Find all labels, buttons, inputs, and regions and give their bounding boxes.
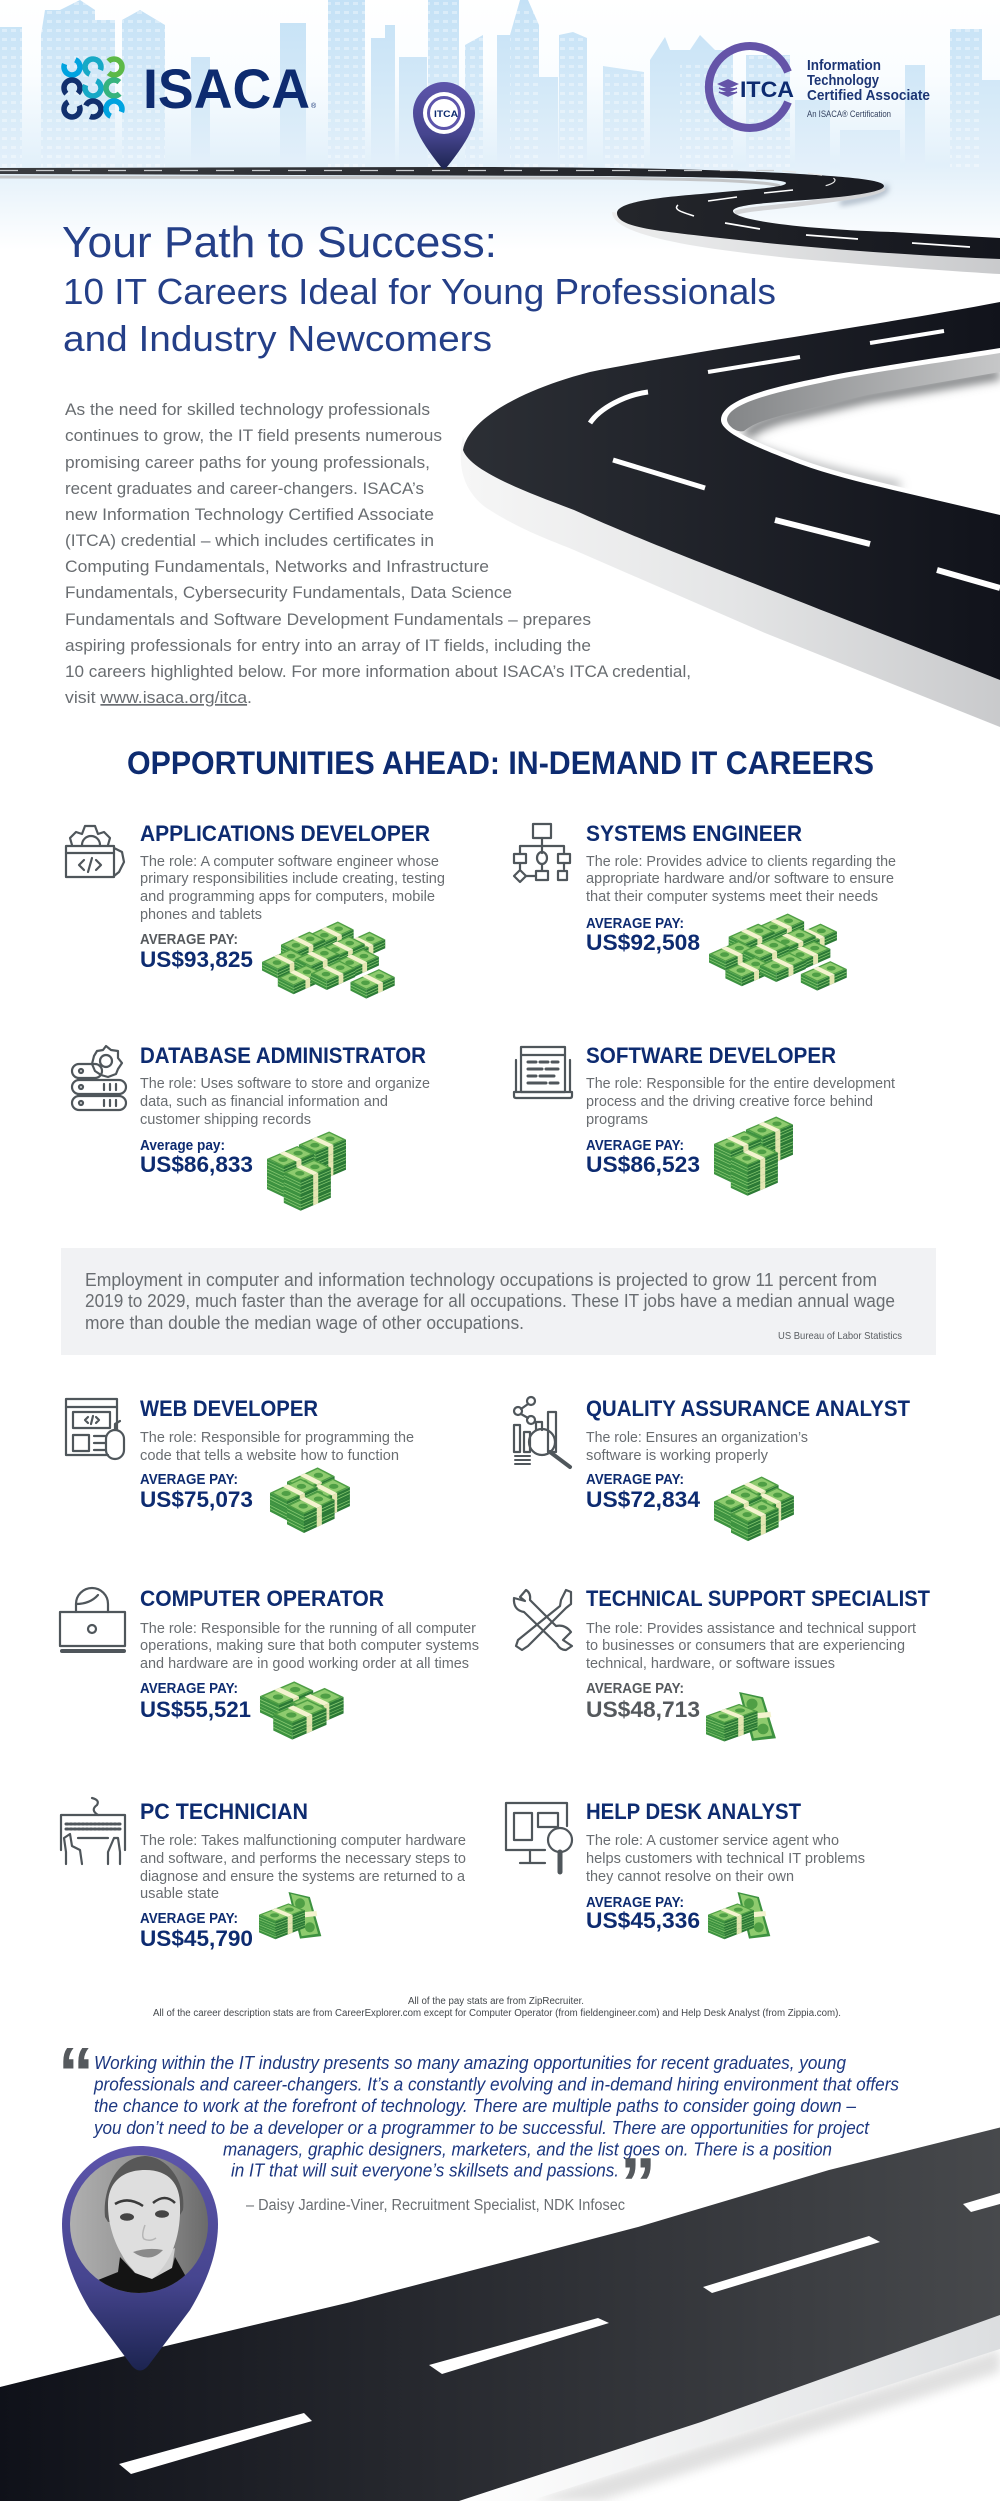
icon: laptop with code bbox=[514, 1047, 572, 1098]
career: Computer Operator: COMPUTER OPERATOR bbox=[140, 1586, 384, 1611]
intro paragraph: recent graduates and career-changers. ISACA’s bbox=[65, 479, 424, 498]
career: Systems Engineer: The role: Provides advice to clients regarding the bbox=[586, 854, 896, 870]
logo: ITCA certification: ITCA bbox=[740, 77, 794, 102]
career: Systems Engineer: that their computer systems meet their needs bbox=[586, 889, 878, 905]
career: Database Administrator: DATABASE ADMINISTRATOR bbox=[140, 1043, 426, 1068]
career: Web Developer: US$75,073 bbox=[140, 1487, 253, 1512]
intro paragraph: visit www.isaca.org/itca . bbox=[65, 688, 252, 707]
career: Computer Operator: and hardware are in good working order at all times bbox=[140, 1656, 469, 1672]
career: PC Technician: usable state bbox=[140, 1886, 219, 1902]
career: Systems Engineer: US$92,508 bbox=[586, 930, 700, 955]
career: Quality Assurance Analyst: US$72,834 bbox=[586, 1487, 701, 1512]
intro paragraph bbox=[65, 400, 691, 707]
intro paragraph: Fundamentals and Software Development Fundamentals – prepares bbox=[65, 610, 591, 629]
opening quote mark: “ bbox=[58, 2034, 94, 2114]
career: Computer Operator: operations, making sure that both computer systems bbox=[140, 1638, 479, 1654]
icon: tall stack of cash bbox=[267, 1132, 346, 1211]
icon: cash and bills bbox=[259, 1892, 321, 1939]
callout: employment statistic: 2019 to 2029, much faster than the average for all occupations. These IT jobs have a median annual wage bbox=[85, 1291, 895, 1311]
icon: code window with gear bbox=[66, 826, 124, 877]
career: Database Administrator bbox=[72, 1043, 430, 1211]
icon: cash and bills bbox=[708, 1892, 770, 1939]
career: Computer Operator bbox=[60, 1586, 479, 1740]
career: PC Technician: AVERAGE PAY: bbox=[140, 1910, 238, 1927]
career: Help Desk Analyst: they cannot resolve on their own bbox=[586, 1869, 794, 1885]
testimonial quote: the chance to work at the forefront of technology. There are multiple paths to consider going down – bbox=[94, 2096, 857, 2116]
icon: hands on keyboard bbox=[61, 1798, 125, 1864]
source footnote bbox=[153, 1996, 841, 2019]
testimonial quote: in IT that will suit everyone’s skillsets and passions. bbox=[231, 2160, 619, 2180]
logo: ITCA certification bbox=[709, 46, 930, 128]
career: Web Developer bbox=[66, 1396, 414, 1533]
icon: wrench and screwdriver bbox=[514, 1590, 572, 1650]
testimonial quote: professionals and career-changers. It’s a constantly evolving and in-demand hiring environment that offers bbox=[93, 2074, 899, 2094]
career: Web Developer: WEB DEVELOPER bbox=[140, 1396, 318, 1421]
logo: ISACA: ® bbox=[311, 102, 317, 110]
career: PC Technician: diagnose and ensure the systems are returned to a bbox=[140, 1869, 466, 1885]
bottom road bbox=[0, 2128, 1000, 2501]
career: Applications Developer: The role: A computer software engineer whose bbox=[140, 854, 439, 870]
career: Applications Developer: and programming apps for computers, mobile bbox=[140, 889, 435, 905]
career: Database Administrator: US$86,833 bbox=[140, 1152, 253, 1177]
career: Systems Engineer: appropriate hardware and/or software to ensure bbox=[586, 871, 894, 887]
career: Software Developer: SOFTWARE DEVELOPER bbox=[586, 1043, 836, 1068]
career: Web Developer: The role: Responsible for programming the bbox=[140, 1430, 414, 1446]
career: Help Desk Analyst: US$45,336 bbox=[586, 1908, 700, 1933]
career: Help Desk Analyst: HELP DESK ANALYST bbox=[586, 1799, 802, 1824]
career: Applications Developer: primary responsibilities include creating, testing bbox=[140, 871, 445, 887]
career: Applications Developer: AVERAGE PAY: bbox=[140, 931, 238, 948]
testimonial quote: managers, graphic designers, marketers, and the list goes on. There is a position bbox=[223, 2140, 832, 2160]
icon: web page and mouse bbox=[66, 1399, 124, 1459]
icon: four stacks of cash bbox=[714, 1476, 794, 1541]
career: Quality Assurance Analyst: The role: Ensures an organization’s bbox=[586, 1430, 808, 1446]
testimonial quote bbox=[58, 2034, 899, 2224]
career: Database Administrator: data, such as financial information and bbox=[140, 1094, 388, 1110]
map pin with portrait bbox=[62, 2146, 218, 2370]
career: Help Desk Analyst: AVERAGE PAY: bbox=[586, 1894, 684, 1911]
source footnote: All of the career description stats are from CareerExplorer.com except for Computer Operator (from fieldengineer.com) and Help Desk Analyst (from Zippia.com). bbox=[153, 2008, 841, 2019]
career: Applications Developer: US$93,825 bbox=[140, 947, 253, 972]
testimonial quote: Working within the IT industry presents so many amazing opportunities for recent graduates, young bbox=[94, 2053, 846, 2073]
city skyline bbox=[0, 0, 1000, 170]
title: 10 IT Careers Ideal for Young Professionals bbox=[63, 271, 776, 312]
intro paragraph: 10 careers highlighted below. For more information about ISACA’s ITCA credential, bbox=[65, 662, 691, 681]
icon: database with gear bbox=[72, 1046, 126, 1110]
career: Help Desk Analyst bbox=[506, 1799, 865, 1939]
quote attribution: – Daisy Jardine-Viner, Recruitment Specialist, NDK Infosec bbox=[246, 2197, 625, 2214]
career: PC Technician bbox=[61, 1798, 466, 1951]
logo: ISACA: ISACA bbox=[143, 57, 310, 120]
career: Applications Developer: phones and tablets bbox=[140, 907, 262, 923]
callout: employment statistic: US Bureau of Labor Statistics bbox=[778, 1330, 902, 1342]
career: Systems Engineer: AVERAGE PAY: bbox=[586, 915, 684, 932]
icon: four stacks of cash bbox=[270, 1467, 350, 1533]
title: and Industry Newcomers bbox=[63, 318, 492, 359]
map pin: ITCA bbox=[413, 82, 475, 169]
career: Computer Operator: The role: Responsible for the running of all computer bbox=[140, 1621, 476, 1637]
career: Software Developer: process and the driving creative force behind bbox=[586, 1094, 873, 1110]
career: Software Developer: programs bbox=[586, 1112, 648, 1128]
portrait photo bbox=[69, 2155, 209, 2300]
career: Technical Support Specialist: technical, hardware, or software issues bbox=[586, 1656, 835, 1672]
icon: three stacks of cash bbox=[260, 1681, 344, 1740]
career: Web Developer: code that tells a website how to function bbox=[140, 1448, 399, 1464]
career: Database Administrator: customer shipping records bbox=[140, 1112, 311, 1128]
career: Quality Assurance Analyst: AVERAGE PAY: bbox=[586, 1471, 684, 1488]
intro paragraph: Computing Fundamentals, Networks and Infrastructure bbox=[65, 557, 489, 576]
career: Database Administrator: Average pay: bbox=[140, 1137, 225, 1154]
icon: flowchart bbox=[514, 824, 570, 882]
logo: ITCA certification: Certified Associate bbox=[807, 87, 930, 104]
winding road: far section bbox=[0, 167, 1000, 274]
career: Web Developer: AVERAGE PAY: bbox=[140, 1471, 238, 1488]
callout: employment statistic bbox=[61, 1248, 936, 1355]
testimonial quote: you don’t need to be a developer or a programmer to be successful. There are opportunities for project bbox=[92, 2118, 870, 2138]
icon: chart and magnifier bbox=[514, 1397, 570, 1467]
intro paragraph: As the need for skilled technology professionals bbox=[65, 400, 430, 419]
callout: employment statistic: more than double the median wage of other occupations. bbox=[85, 1313, 524, 1333]
career: Technical Support Specialist: TECHNICAL SUPPORT SPECIALIST bbox=[586, 1586, 931, 1611]
title bbox=[62, 218, 776, 359]
career: Help Desk Analyst: helps customers with technical IT problems bbox=[586, 1851, 865, 1867]
career: PC Technician: PC TECHNICIAN bbox=[140, 1799, 308, 1824]
intro paragraph: (ITCA) credential – which includes certificates in bbox=[65, 531, 434, 550]
icon: cash stack and bills bbox=[706, 1692, 776, 1742]
logo: ITCA certification: An ISACA® Certification bbox=[807, 109, 891, 120]
icon: pile of cash bbox=[262, 922, 395, 999]
career: Database Administrator: The role: Uses software to store and organize bbox=[140, 1076, 430, 1092]
hero sky background bbox=[0, 0, 1000, 250]
icon: monitor and magnifier bbox=[506, 1803, 572, 1872]
career: Technical Support Specialist: AVERAGE PAY: bbox=[586, 1680, 684, 1697]
career: Software Developer: AVERAGE PAY: bbox=[586, 1137, 684, 1154]
career: Systems Engineer: SYSTEMS ENGINEER bbox=[586, 821, 802, 846]
intro paragraph: new Information Technology Certified Associate bbox=[65, 505, 434, 524]
callout: employment statistic: Employment in computer and information technology occupations is projected to grow 11 percent from bbox=[85, 1270, 877, 1290]
career: Computer Operator: AVERAGE PAY: bbox=[140, 1680, 238, 1697]
intro paragraph: continues to grow, the IT field presents numerous bbox=[65, 426, 442, 445]
career: PC Technician: and software, and performs the necessary steps to bbox=[140, 1851, 466, 1867]
logo: ISACA bbox=[61, 56, 317, 120]
career: Technical Support Specialist bbox=[514, 1586, 931, 1742]
career: Quality Assurance Analyst bbox=[514, 1396, 911, 1541]
logo: ITCA certification: Information bbox=[807, 57, 881, 74]
career: Applications Developer bbox=[66, 821, 445, 999]
career: PC Technician: The role: Takes malfunctioning computer hardware bbox=[140, 1833, 466, 1849]
section heading: OPPORTUNITIES AHEAD: IN-DEMAND IT CAREERS bbox=[127, 745, 874, 781]
icon: pile of cash bbox=[709, 914, 847, 991]
source footnote: All of the pay stats are from ZipRecruiter. bbox=[408, 1996, 584, 2007]
career: Computer Operator: US$55,521 bbox=[140, 1697, 251, 1722]
career: Software Developer: The role: Responsible for the entire development bbox=[586, 1076, 895, 1092]
intro paragraph: aspiring professionals for entry into an array of IT fields, including the bbox=[65, 636, 591, 655]
winding road: middle section bbox=[461, 302, 1000, 727]
career: Technical Support Specialist: US$48,713 bbox=[586, 1697, 700, 1722]
map pin: ITCA: ITCA bbox=[434, 109, 459, 119]
intro paragraph: Fundamentals, Cybersecurity Fundamentals, Data Science bbox=[65, 583, 512, 602]
career: Applications Developer: APPLICATIONS DEVELOPER bbox=[140, 821, 430, 846]
career: Help Desk Analyst: The role: A customer service agent who bbox=[586, 1833, 839, 1849]
career: Technical Support Specialist: The role: Provides assistance and technical support bbox=[586, 1621, 916, 1637]
title: Your Path to Success: bbox=[62, 218, 497, 267]
career: Software Developer bbox=[514, 1043, 895, 1196]
closing quote mark: ” bbox=[620, 2144, 656, 2224]
career: Quality Assurance Analyst: software is working properly bbox=[586, 1448, 769, 1464]
icon: person at laptop bbox=[60, 1588, 125, 1651]
career: Quality Assurance Analyst: QUALITY ASSURANCE ANALYST bbox=[586, 1396, 911, 1421]
logo: ITCA certification: Technology bbox=[807, 72, 880, 89]
career: Technical Support Specialist: to businesses or consumers that are experiencing bbox=[586, 1638, 905, 1654]
icon: tall stack of cash bbox=[714, 1117, 793, 1196]
career: Systems Engineer bbox=[514, 821, 896, 991]
intro paragraph: promising career paths for young professionals, bbox=[65, 453, 430, 472]
career: PC Technician: US$45,790 bbox=[140, 1926, 253, 1951]
career: Software Developer: US$86,523 bbox=[586, 1152, 700, 1177]
